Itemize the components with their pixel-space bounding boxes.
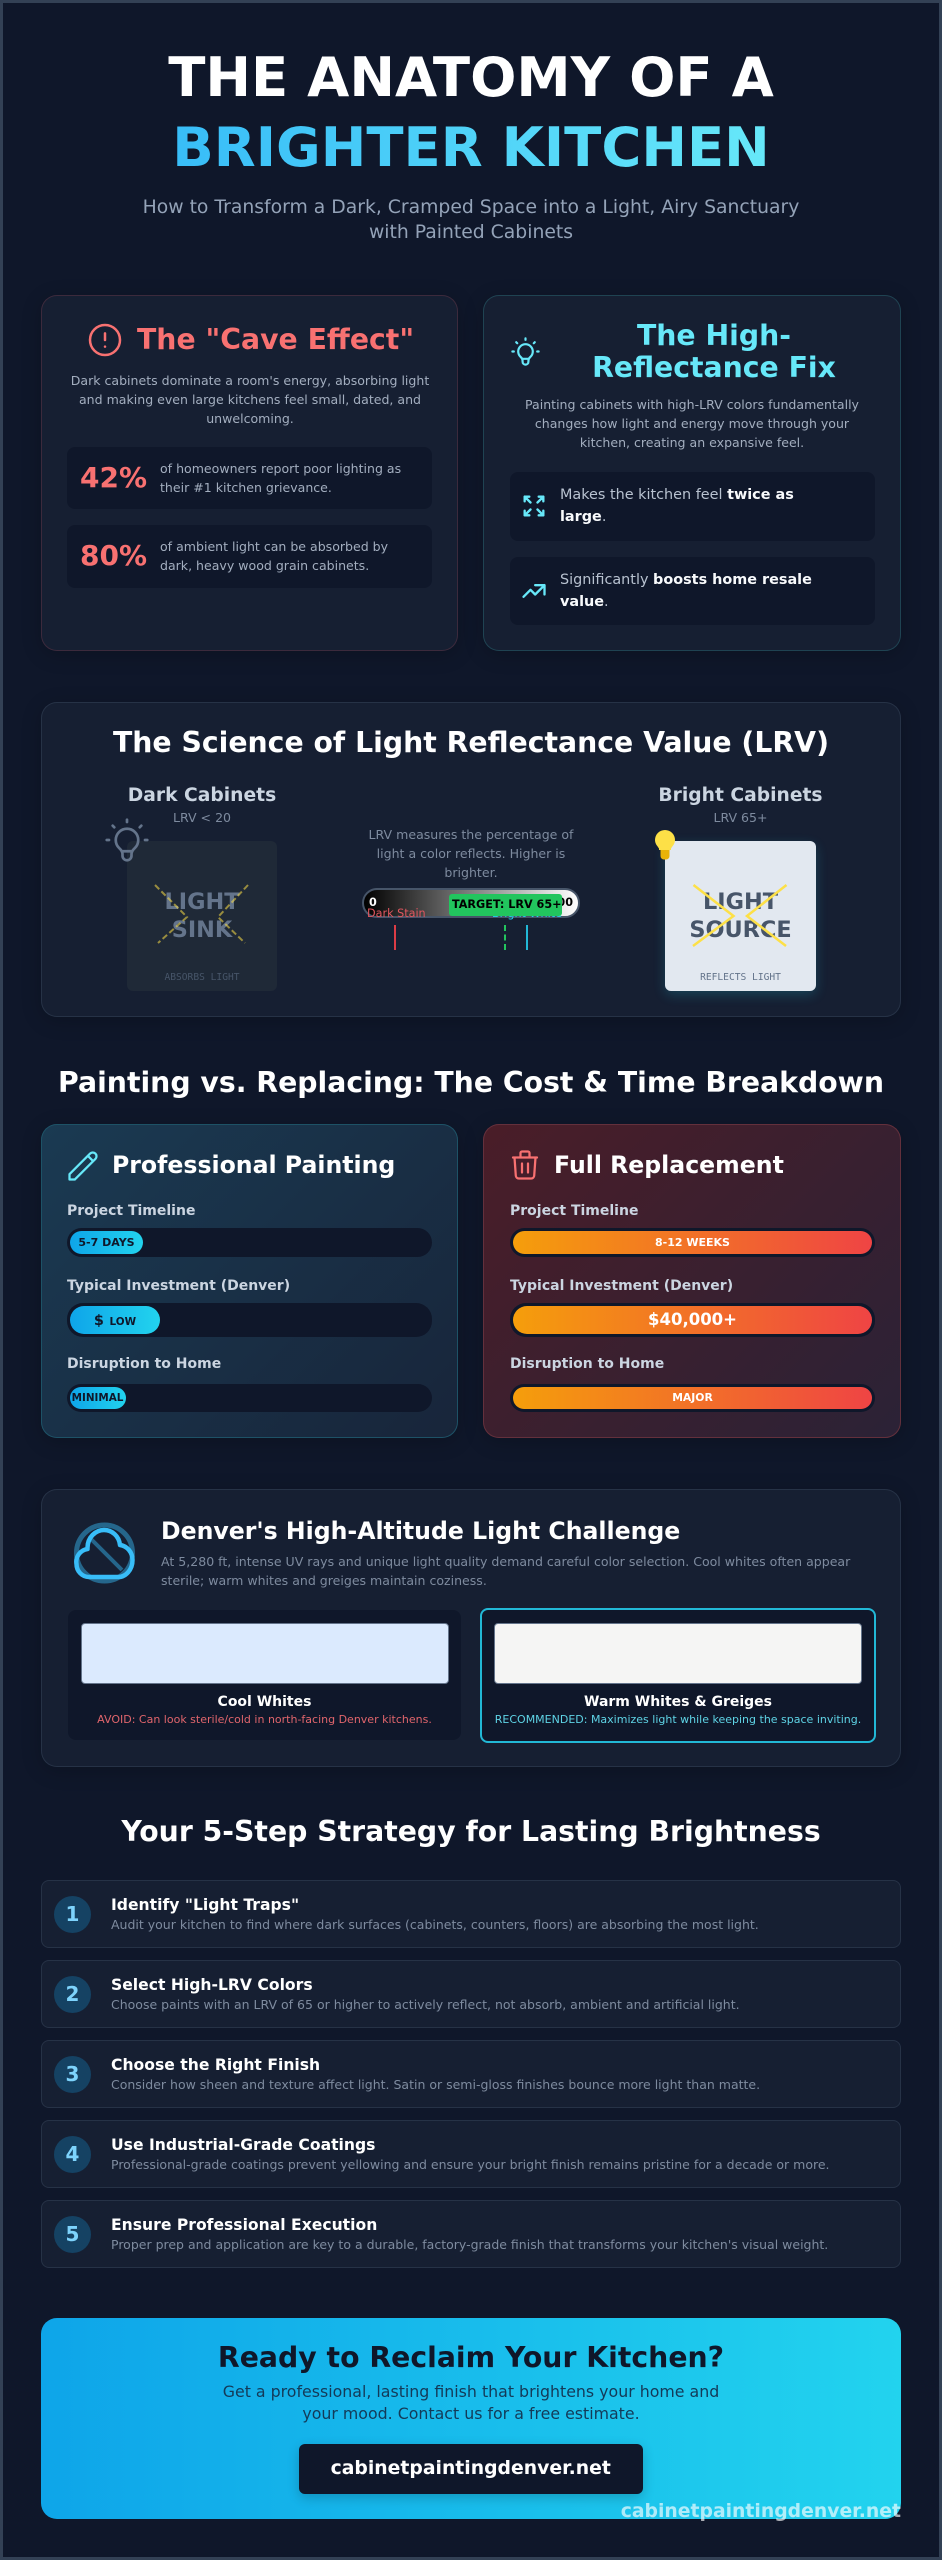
- bar fill: 40,000 plus: [513, 1306, 872, 1334]
- heading: high-reflectance fix: Reflectance Fix: [592, 351, 836, 384]
- panel: science of LRV: [41, 702, 901, 1017]
- step title: Identify "Light Traps": [111, 1896, 299, 1914]
- step number: 3: [66, 2062, 79, 2086]
- text: cave effect description: unwelcoming.: [206, 411, 294, 426]
- stat description: [160, 461, 401, 495]
- heading: cave effect: The "Cave Effect": [137, 323, 414, 356]
- benefit text: [560, 487, 794, 525]
- label: timeline: Project Timeline: [510, 1203, 638, 1219]
- benefit text: Makes the kitchen feel twice as: [560, 487, 794, 503]
- label: disruption: Disruption to Home: [510, 1356, 664, 1372]
- text: LRV explanation: LRV measures the percentage of: [369, 826, 573, 842]
- bar fill: major: MAJOR: [672, 1391, 713, 1404]
- step number: 2: [66, 1982, 79, 2006]
- text: LRV explanation: light a color reflects. Higher is: [377, 846, 565, 860]
- label: investment: Typical Investment (Denver): [510, 1278, 733, 1294]
- text: denver description: At 5,280 ft, intense UV rays and unique light quality demand careful color selection. Cool whites often appear: [161, 1554, 850, 1568]
- text: light source: SOURCE: [689, 917, 792, 943]
- step number: 4: [66, 2142, 79, 2166]
- stat value: 80%: [80, 539, 147, 572]
- text: denver description: [161, 1554, 850, 1588]
- subtitle: with Painted Cabinets: [369, 222, 573, 242]
- caption: reflects light: REFLECTS LIGHT: [700, 972, 781, 983]
- label: timeline: Project Timeline: [67, 1203, 195, 1219]
- icon: trending up: [522, 584, 546, 598]
- heading: five-step strategy: Your 5-Step Strategy for Lasting Brightness: [121, 1815, 821, 1848]
- bar: investment: [510, 1303, 875, 1337]
- benefit text: [560, 572, 812, 610]
- button: website: cabinetpaintingdenver.net: [331, 2458, 611, 2479]
- stat description: [160, 539, 388, 573]
- marker: dark stain: [394, 925, 396, 950]
- benefit: resale value: [510, 557, 875, 625]
- heading: denver challenge: Denver's High-Altitude Light Challenge: [161, 1517, 680, 1545]
- panel: the high-reflectance fix: [483, 295, 901, 651]
- label: warm whites: Warm Whites & Greiges: [584, 1694, 772, 1710]
- step 3: [41, 2040, 901, 2108]
- benefit text: Significantly boosts home resale: [560, 572, 812, 588]
- step description: Choose paints with an LRV of 65 or higher to actively reflect, not absorb, ambient and artificial light.: [111, 1997, 740, 2012]
- bar fill: low: [70, 1306, 160, 1334]
- title: BRIGHTER KITCHEN: [172, 115, 770, 179]
- stat value: 42%: [80, 461, 147, 494]
- step 2: [41, 1960, 901, 2028]
- step 4: [41, 2120, 901, 2188]
- swatch: cool white: [80, 1623, 448, 1684]
- step number: [54, 2216, 91, 2252]
- bar: timeline: [67, 1228, 432, 1257]
- step number: [54, 1976, 91, 2012]
- text: cave effect description: [71, 373, 429, 426]
- text: cave effect description: Dark cabinets dominate a room's energy, absorbing light: [71, 373, 429, 388]
- step number: [54, 1896, 91, 1932]
- bar fill: 5-7 days: [70, 1231, 143, 1254]
- scale bar: [362, 888, 580, 918]
- bar: disruption: [510, 1384, 875, 1412]
- bar: timeline: [510, 1228, 875, 1257]
- scale maximum: 100: [550, 896, 573, 909]
- swatch: dark cabinet: [127, 841, 277, 991]
- text: fix description: changes how light and energy move through your: [535, 416, 849, 431]
- swatch: bright cabinet: [665, 841, 816, 991]
- step description: Professional-grade coatings prevent yellowing and ensure your bright finish remains pristine for a decade or more.: [111, 2157, 830, 2172]
- label: LRV under 20: LRV < 20: [173, 810, 231, 825]
- chart: LRV scale: [362, 888, 580, 950]
- text: call to action description: [223, 2382, 719, 2423]
- rays: absorbed light: [154, 884, 249, 944]
- text: light sink: LIGHT: [164, 889, 240, 915]
- marker: target: [504, 925, 506, 950]
- panel: the cave effect: [41, 295, 458, 651]
- icon: light bulb: [511, 337, 540, 366]
- bar: investment: [67, 1303, 432, 1337]
- icon: alert circle: [88, 324, 122, 356]
- marker: bright white: [526, 925, 528, 950]
- step title: Ensure Professional Execution: [111, 2216, 377, 2234]
- step title: Select High-LRV Colors: [111, 1976, 313, 1994]
- text: LRV explanation: brighter.: [444, 864, 498, 880]
- heading: high-reflectance fix: The High-: [637, 319, 791, 352]
- text: light sink: [164, 889, 240, 943]
- heading: high-reflectance fix: [592, 319, 836, 384]
- bar fill: minimal: [70, 1387, 126, 1409]
- step description: Audit your kitchen to find where dark surfaces (cabinets, counters, floors) are absorbing the most light.: [111, 1917, 759, 1932]
- step 5: [41, 2200, 901, 2268]
- button: website: [299, 2444, 642, 2494]
- bar fill: 8-12 weeks: 8-12 WEEKS: [655, 1236, 730, 1249]
- text: light source: LIGHT: [703, 889, 778, 915]
- bar: disruption: [67, 1384, 432, 1412]
- step description: Proper prep and application are key to a durable, factory-grade finish that transforms your kitchen's visual weight.: [111, 2237, 828, 2252]
- heading: cost and time breakdown: Painting vs. Replacing: The Cost & Time Breakdown: [58, 1066, 884, 1099]
- bar fill: major: [513, 1387, 872, 1409]
- bar fill: low: $ LOW: [94, 1313, 136, 1329]
- option: cool whites: [68, 1610, 461, 1740]
- target badge: TARGET: LRV 65+: [452, 898, 562, 911]
- panel: denver light challenge: [41, 1489, 901, 1767]
- stat: 80 percent: [67, 525, 432, 588]
- icon: expand: [523, 495, 545, 517]
- option: warm whites and greiges: [480, 1608, 876, 1743]
- icon: cloud with sun: [74, 1522, 135, 1584]
- note: recommended: RECOMMENDED: Maximizes light while keeping the space inviting.: [495, 1713, 861, 1726]
- swatch: warm white: [494, 1623, 862, 1684]
- text: call to action description: your mood. Contact us for a free estimate.: [302, 2404, 640, 2423]
- label: cool whites: Cool Whites: [218, 1694, 311, 1710]
- stat: 42 percent: [67, 447, 432, 509]
- benefit text: large.: [560, 509, 606, 525]
- icon: trash: [512, 1150, 538, 1180]
- step number: [54, 2056, 91, 2092]
- text: cave effect description: and making even large kitchens feel small, dated, and: [79, 392, 421, 407]
- bar fill: 8-12 weeks: [513, 1231, 872, 1254]
- label: disruption: Disruption to Home: [67, 1356, 221, 1372]
- text: denver description: sterile; warm whites and greiges maintain coziness.: [161, 1572, 487, 1588]
- note: avoid: AVOID: Can look sterile/cold in north-facing Denver kitchens.: [97, 1713, 432, 1726]
- benefit text: value.: [560, 594, 609, 610]
- text: fix description: Painting cabinets with high-LRV colors fundamentally: [525, 397, 859, 412]
- marker label: dark stain: Dark Stain: [367, 907, 426, 920]
- stat description: dark, heavy wood grain cabinets.: [160, 558, 369, 573]
- panel: professional painting: [41, 1124, 458, 1438]
- label: investment: Typical Investment (Denver): [67, 1278, 290, 1294]
- label: LRV 65 plus: LRV 65+: [713, 810, 768, 825]
- heading: full replacement: Full Replacement: [554, 1151, 784, 1179]
- panel: full replacement: [483, 1124, 901, 1438]
- target badge: [449, 894, 562, 916]
- heading: bright cabinets: Bright Cabinets: [658, 785, 823, 806]
- text: fix description: [525, 397, 859, 450]
- stat description: of ambient light can be absorbed by: [160, 539, 388, 554]
- subtitle: [143, 196, 799, 242]
- text: fix description: kitchen, creating an expansive feel.: [580, 435, 804, 450]
- step title: Choose the Right Finish: [111, 2056, 320, 2074]
- heading: professional painting: Professional Painting: [112, 1151, 395, 1179]
- icon: dim bulb: [105, 818, 149, 862]
- bar fill: 40,000 plus: $40,000+: [648, 1310, 737, 1329]
- text: light sink: SINK: [172, 917, 232, 943]
- text: light source: [689, 889, 792, 943]
- heading: dark cabinets: Dark Cabinets: [128, 785, 276, 806]
- subtitle: How to Transform a Dark, Cramped Space into a Light, Airy Sanctuary: [143, 196, 799, 218]
- text: LRV explanation: [369, 826, 574, 880]
- step 1: [41, 1880, 901, 1948]
- step description: Consider how sheen and texture affect light. Satin or semi-gloss finishes bounce more light than matte.: [111, 2077, 760, 2092]
- step title: Use Industrial-Grade Coatings: [111, 2136, 375, 2154]
- stat description: of homeowners report poor lighting as: [160, 461, 401, 476]
- scale minimum: 0: [369, 896, 377, 909]
- title: THE ANATOMY OF A: [168, 45, 774, 109]
- icon: glowing bulb: [655, 830, 675, 860]
- step number: [54, 2136, 91, 2172]
- panel: call to action: [41, 2318, 901, 2519]
- heading: reclaim your kitchen: Ready to Reclaim Your Kitchen?: [218, 2341, 724, 2374]
- stat description: their #1 kitchen grievance.: [160, 480, 332, 495]
- heading: science of LRV: The Science of Light Reflectance Value (LRV): [113, 726, 829, 759]
- bar fill: 5-7 days: 5-7 DAYS: [78, 1236, 135, 1249]
- icon: pencil: [68, 1151, 98, 1181]
- marker label: bright white: Bright White: [492, 907, 562, 920]
- caption: absorbs light: ABSORBS LIGHT: [164, 972, 240, 983]
- title: [168, 45, 774, 179]
- benefit: twice as large: [510, 472, 875, 541]
- watermark: cabinetpaintingdenver.net: [621, 2501, 901, 2522]
- step number: 1: [66, 1902, 79, 1926]
- rays: reflected light: [692, 884, 788, 947]
- text: call to action description: Get a professional, lasting finish that brightens your home and: [223, 2382, 719, 2401]
- step number: 5: [66, 2222, 79, 2246]
- bar fill: minimal: MINIMAL: [72, 1392, 123, 1404]
